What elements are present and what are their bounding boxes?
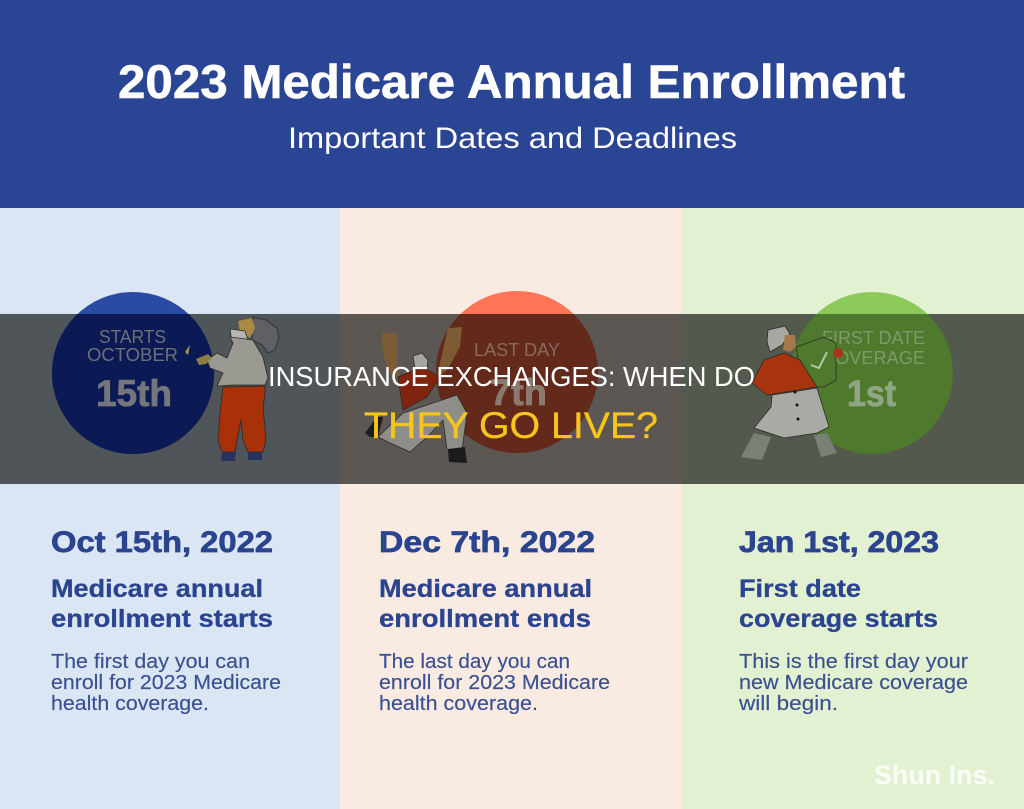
- subheading: enrollment ends: [379, 605, 591, 633]
- description: [379, 651, 610, 715]
- header banner: [0, 0, 1024, 208]
- sweater: [752, 353, 817, 395]
- dimmed circle: starts october: [52, 314, 214, 454]
- shoes: [221, 452, 236, 461]
- face: [783, 335, 796, 352]
- check mark: [811, 352, 827, 368]
- dimmed circle: last day: LAST DAY: [474, 340, 560, 360]
- skirt: [754, 388, 829, 438]
- panel: enrollment ends: [340, 208, 682, 809]
- hair: [252, 317, 279, 353]
- sack: [796, 337, 836, 387]
- subheading: Medicare annual: [51, 575, 263, 603]
- face: [238, 318, 255, 338]
- figure: person with pencil: [185, 317, 279, 461]
- description: enroll for 2023 Medicare: [51, 672, 281, 694]
- subheading: [51, 575, 273, 633]
- pants: [378, 395, 467, 452]
- subheading: First date: [739, 575, 861, 603]
- dimmed circle: starts october: 15th: [96, 373, 172, 414]
- description: new Medicare coverage: [739, 672, 968, 694]
- dark title band: [0, 314, 1024, 484]
- shirt: [207, 337, 268, 386]
- date heading: Jan 1st, 2023: [739, 526, 939, 559]
- dimmed circle: starts october: STARTS: [99, 327, 166, 347]
- face mask: [230, 329, 248, 345]
- shirt: [398, 367, 440, 410]
- dimmed circle: first date coverage: COVERAGE: [822, 348, 925, 368]
- description: [738, 651, 968, 715]
- raised arms: [382, 333, 400, 377]
- description: [51, 651, 281, 715]
- blue date circle: [52, 292, 214, 454]
- subheading: coverage starts: [739, 605, 938, 633]
- title line 2: THEY GO LIVE?: [364, 405, 658, 446]
- header title: 2023 Medicare Annual Enrollment: [118, 55, 905, 108]
- date heading: Dec 7th, 2022: [379, 526, 595, 559]
- dimmed circle: first date coverage: 1st: [847, 373, 896, 414]
- description: health coverage.: [51, 693, 209, 715]
- dimmed circle: first date coverage: FIRST DATE: [822, 328, 925, 348]
- shoes: [448, 447, 467, 463]
- panel: coverage starts: [682, 208, 1024, 809]
- description: enroll for 2023 Medicare: [379, 672, 610, 694]
- description: The first day you can: [51, 651, 250, 673]
- dimmed circle: last day: 7th: [490, 372, 547, 413]
- description: will begin.: [738, 693, 838, 715]
- description: The last day you can: [379, 651, 570, 673]
- description: health coverage.: [379, 693, 538, 715]
- dimmed circle: first date coverage: [792, 314, 953, 454]
- hair: [767, 326, 790, 352]
- figure: person with sack: [741, 326, 843, 460]
- panel: enrollment starts: [0, 208, 340, 809]
- hand and pencil: [196, 354, 212, 365]
- subheading: Medicare annual: [379, 575, 592, 603]
- buttons: [794, 390, 800, 420]
- date heading: Oct 15th, 2022: [51, 526, 273, 559]
- pants: [218, 386, 266, 452]
- header subtitle: Important Dates and Deadlines: [288, 122, 737, 155]
- description: This is the first day your: [739, 651, 968, 673]
- orange date circle: [436, 291, 598, 453]
- watermark: Shun Ins.: [874, 760, 995, 790]
- head: [413, 353, 428, 369]
- dimmed circle: starts october: OCTOBER: [87, 345, 178, 365]
- subheading: [739, 575, 938, 633]
- hand: [833, 348, 843, 358]
- figure: jumping person: [365, 327, 467, 463]
- legs: [741, 433, 771, 460]
- subheading: enrollment starts: [51, 605, 273, 633]
- title line 1: INSURANCE EXCHANGES: WHEN DO: [268, 361, 755, 392]
- subheading: [379, 575, 592, 633]
- dimmed circle: last day: [436, 314, 598, 453]
- green date circle: [791, 292, 953, 454]
